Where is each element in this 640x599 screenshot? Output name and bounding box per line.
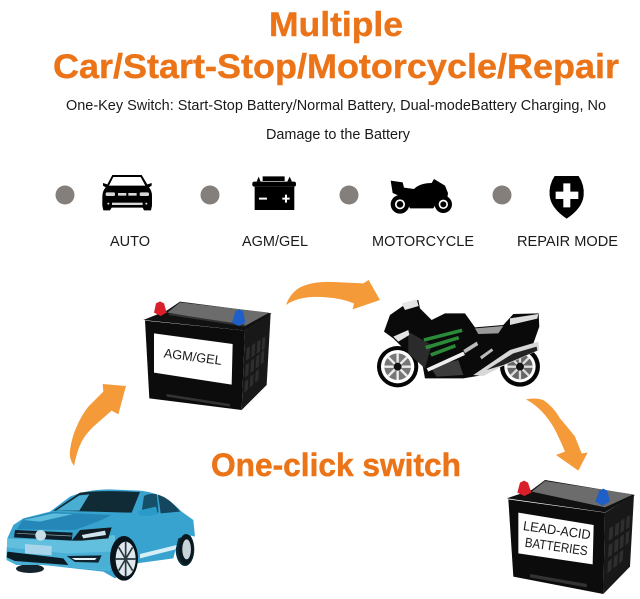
mode labels: MOTORCYCLE (372, 234, 474, 250)
switch caption: One-click switch (211, 447, 461, 483)
battery label text: AGM/GEL (163, 345, 223, 368)
bullet: repair mode (492, 186, 512, 204)
title: Car/Start-Stop/Motorcycle/Repair (53, 48, 619, 86)
mode labels: AUTO (110, 234, 150, 250)
bullet: agm/gel (200, 186, 220, 204)
description text: Damage to the Battery (266, 127, 411, 143)
description text: One-Key Switch: Start-Stop Battery/Normal Battery, Dual-modeBattery Charging, No (66, 98, 606, 114)
title (53, 6, 619, 86)
arrow: car to AGM battery (70, 384, 126, 466)
mode labels: AGM/GEL (242, 234, 308, 250)
bullet: motorcycle (340, 186, 358, 204)
mode labels: REPAIR MODE (517, 234, 618, 250)
icon: motorcycle (391, 179, 452, 214)
bullet: auto (56, 186, 74, 204)
battery label text (522, 518, 592, 558)
icon: repair shield (550, 176, 584, 219)
battery label text: LEAD-ACID (522, 518, 592, 542)
arrow: AGM battery to motorcycle (286, 280, 380, 309)
mode labels (110, 234, 618, 250)
car photo (7, 489, 195, 581)
battery label text: BATTERIES (524, 535, 589, 558)
arrow: motorcycle to lead-acid battery (526, 398, 588, 471)
battery: lead-acid (507, 480, 635, 594)
title: Multiple (269, 6, 403, 44)
battery: AGM/GEL (143, 301, 272, 410)
motorcycle photo (377, 299, 540, 387)
description text (66, 98, 606, 143)
icon: battery (252, 176, 296, 210)
icon: car (102, 175, 152, 210)
mode selector row (56, 175, 618, 250)
